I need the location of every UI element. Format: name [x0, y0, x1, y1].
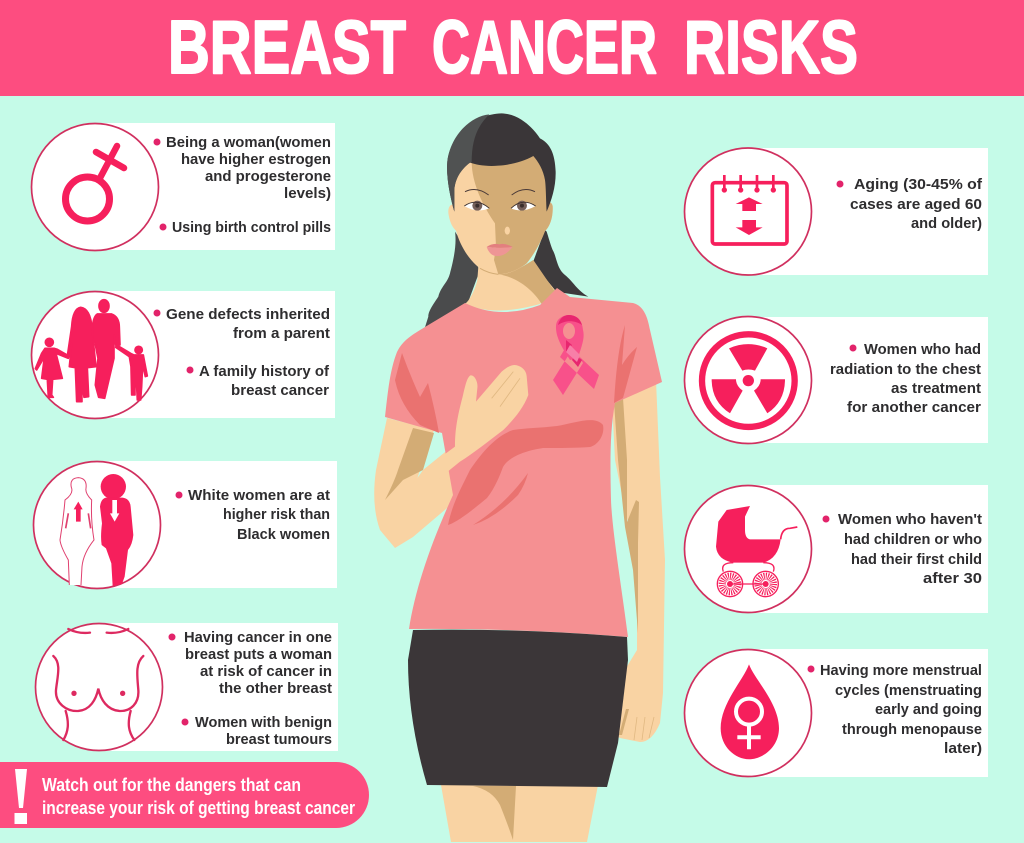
panel: menstrual cycles	[684, 649, 988, 777]
text: breast conditions: breast puts a woman	[185, 647, 332, 663]
text: aging: cases are aged 60	[850, 197, 982, 213]
text: radiation: for another cancer	[847, 400, 981, 416]
text: breast conditions: at risk of cancer in	[200, 664, 332, 680]
skirt	[408, 630, 628, 787]
callout text: increase your risk of getting breast cancer	[42, 797, 355, 818]
text: menstrual cycles: through menopause	[842, 722, 982, 738]
text: menstrual cycles: cycles (menstruating	[835, 683, 982, 699]
icon: female symbol	[66, 146, 124, 221]
text: menstrual cycles: early and going	[875, 702, 982, 718]
icon: baby pram	[716, 506, 797, 597]
text: menstrual cycles: later)	[944, 741, 982, 757]
callout: warning banner	[0, 762, 369, 828]
icon: drop with female symbol	[721, 664, 779, 759]
text: children: after 30	[923, 571, 982, 587]
icon: family silhouettes	[35, 300, 147, 402]
text: radiation: radiation to the chest	[830, 362, 981, 378]
text: being a woman: levels)	[284, 186, 331, 202]
text: aging: and older)	[911, 216, 982, 232]
text: radiation: as treatment	[891, 381, 981, 397]
text: breast conditions: Having cancer in one	[184, 630, 332, 646]
hand on chest	[413, 365, 528, 483]
callout text: Watch out for the dangers that can	[42, 774, 301, 795]
text: aging	[836, 177, 982, 232]
panel: genetics and family history	[32, 291, 335, 418]
panel: being a woman	[32, 123, 335, 250]
illustration: woman	[374, 113, 665, 842]
title	[168, 5, 858, 89]
text: genes: from a parent	[233, 326, 330, 342]
text: being a woman: Using birth control pills	[172, 220, 331, 236]
text: menstrual cycles: Having more menstrual	[820, 663, 982, 679]
panel: aging	[684, 148, 988, 275]
legs	[441, 785, 598, 842]
face details	[464, 189, 536, 256]
text: children	[822, 512, 982, 587]
icon: exclamation mark	[14, 769, 27, 824]
icon: calendar with arrows	[712, 175, 787, 244]
text: race: White women are at	[188, 488, 330, 504]
text: being a woman	[154, 135, 331, 236]
text: menstrual cycles	[808, 663, 982, 757]
title: BREAST	[168, 5, 406, 89]
panel: children	[684, 485, 988, 613]
text: radiation: Women who had	[864, 342, 981, 358]
text: genes: Gene defects inherited	[166, 307, 330, 323]
text: race	[176, 488, 330, 543]
title: CANCER	[432, 5, 657, 89]
text: breast conditions: breast tumours	[226, 732, 332, 748]
text: breast conditions: the other breast	[219, 681, 332, 697]
icon: breasts outline	[53, 629, 143, 740]
right arm	[612, 380, 665, 742]
text: race: higher risk than	[223, 507, 330, 523]
callout text	[42, 774, 355, 818]
neck	[465, 260, 555, 310]
text: being a woman: Being a woman(women	[166, 135, 331, 151]
ribbon	[553, 315, 599, 395]
text: aging: Aging (30-45% of	[854, 177, 982, 193]
text: being a woman: and progesterone	[205, 169, 331, 185]
back hair	[425, 230, 588, 327]
title: RISKS	[684, 5, 858, 89]
icon: radiation symbol	[702, 334, 795, 427]
text: children: Women who haven't	[838, 512, 982, 528]
shirt	[385, 288, 662, 637]
head	[447, 113, 556, 274]
header banner	[0, 0, 1024, 96]
panel: radiation	[684, 316, 988, 444]
text: children: had children or who	[844, 532, 982, 548]
panel: prior breast conditions	[36, 623, 338, 751]
shirt folds	[395, 325, 637, 525]
left arm	[374, 418, 500, 548]
icon: white and black women	[60, 474, 133, 586]
text: radiation	[830, 342, 981, 416]
text: breast conditions	[168, 630, 332, 748]
text: genes: A family history of	[199, 364, 329, 380]
text: genes: breast cancer	[231, 383, 329, 399]
text: being a woman: have higher estrogen	[181, 152, 331, 168]
hair	[447, 113, 556, 212]
text: genes	[154, 307, 330, 399]
text: race: Black women	[237, 527, 330, 543]
text: children: had their first child	[851, 552, 982, 568]
text: breast conditions: Women with benign	[195, 715, 332, 731]
panel: race	[34, 461, 337, 588]
